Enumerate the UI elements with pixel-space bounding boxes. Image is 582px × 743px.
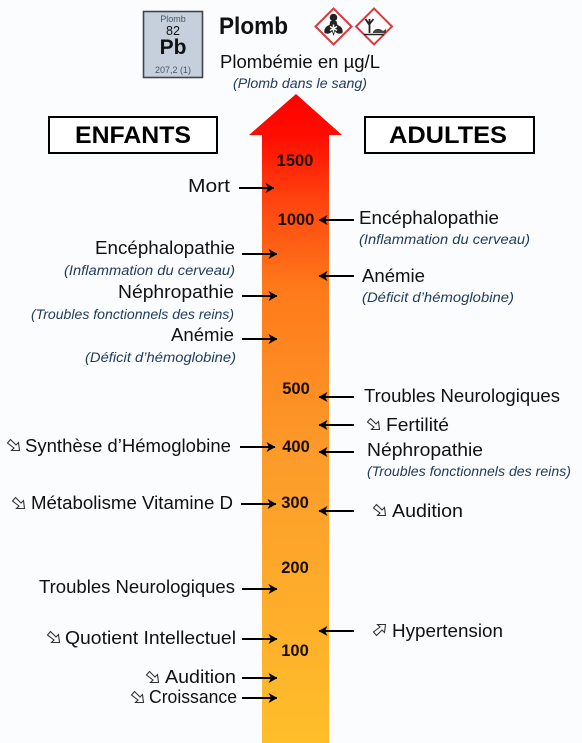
heading: Plomb: Plomb (219, 13, 288, 40)
arrow: Hypertension (319, 630, 354, 632)
note: Plomb dans le sang: (Plomb dans le sang) (233, 76, 367, 91)
scale values: 1500 (277, 152, 313, 170)
arrow: Encéphalopathie (242, 253, 277, 255)
arrow: Troubles Neurologiques (242, 588, 277, 590)
effect: Anémie: Anémie (171, 325, 234, 345)
effect: Quotient Intellectuel: Quotient Intellectuel (65, 628, 236, 648)
icon: decrease (12, 498, 24, 508)
effect: Audition: Audition (165, 667, 236, 687)
icon: decrease (146, 672, 158, 682)
heading box: ADULTES: ADULTES (389, 122, 507, 149)
element tile: lead: 207,2 (1) (155, 65, 191, 75)
arrow: Anémie (319, 275, 354, 277)
arrow: Croissance (242, 697, 277, 699)
heading box: ENFANTS (49, 117, 217, 153)
icon: decrease (48, 632, 60, 642)
arrow: Encéphalopathie (319, 219, 354, 221)
adult effects (319, 208, 571, 641)
arrow: Synthèse d'Hémoglobine (240, 446, 275, 448)
effect: Audition: Audition (392, 501, 463, 521)
effect: Synthèse d'Hémoglobine: Synthèse d’Hémoglobine (25, 436, 231, 456)
effect: Encéphalopathie: Encéphalopathie (95, 238, 235, 258)
icon: increase (374, 624, 386, 636)
scale values (277, 152, 314, 660)
element tile: lead: Plomb (160, 14, 186, 24)
icon: decrease (374, 504, 386, 516)
element tile: lead: 82 (166, 24, 180, 38)
scale values: 1000 (278, 211, 314, 229)
arrow: Quotient Intellectuel (242, 638, 277, 640)
element tile: lead (144, 12, 202, 78)
icon: environment hazard pictogram (356, 8, 392, 44)
scale values: 300 (281, 494, 309, 512)
subtitle: Plombémie: Plombémie en µg/L (220, 52, 380, 72)
heading box: ENFANTS: ENFANTS (75, 122, 191, 149)
note: Troubles fonctionnels des reins: (Troubles fonctionnels des reins) (367, 464, 571, 479)
effect: Néphropathie: Néphropathie (118, 282, 234, 302)
scale values: 500 (282, 380, 310, 398)
note: Troubles fonctionnels des reins: (Troubles fonctionnels des reins) (31, 307, 234, 322)
element tile: lead: Pb (160, 36, 186, 59)
arrow: Anémie (242, 338, 277, 340)
effect: Encéphalopathie: Encéphalopathie (359, 208, 499, 228)
concentration scale arrow (249, 94, 342, 743)
arrow: Néphropathie (242, 295, 277, 297)
arrow: Métabolisme Vitamine D (241, 503, 276, 505)
effect: Fertilité: Fertilité (386, 415, 449, 435)
scale values: 100 (281, 642, 309, 660)
arrow: Mort (239, 187, 274, 189)
icon: health hazard pictogram (316, 8, 352, 44)
note: Inflammation du cerveau: (Inflammation du cerveau) (64, 263, 235, 278)
icon: decrease (8, 440, 20, 450)
note: Déficit d'hémoglobine: (Déficit d’hémoglobine) (85, 350, 236, 365)
effect: Hypertension: Hypertension (392, 621, 503, 641)
arrow: Audition (319, 510, 354, 512)
icon: decrease (132, 692, 144, 702)
arrow: Fertilité (319, 424, 354, 426)
arrow: Néphropathie (319, 451, 354, 453)
scale values: 400 (282, 438, 310, 456)
scale values: 200 (281, 559, 309, 577)
arrow: Troubles Neurologiques (319, 396, 354, 398)
effect: Troubles Neurologiques: Troubles Neurologiques (39, 577, 235, 597)
arrow: Audition (242, 677, 277, 679)
heading box: ADULTES (365, 117, 534, 153)
note: Inflammation du cerveau: (Inflammation du cerveau) (359, 232, 530, 247)
icon: decrease (368, 418, 380, 430)
children effects (8, 176, 277, 707)
effect: Croissance: Croissance (149, 687, 237, 707)
effect: Troubles Neurologiques: Troubles Neurologiques (364, 386, 560, 406)
effect: Mort: Mort (188, 176, 230, 196)
effect: Néphropathie: Néphropathie (367, 440, 483, 460)
effect: Anémie: Anémie (362, 266, 425, 286)
effect: Métabolisme Vitamine D: Métabolisme Vitamine D (31, 493, 233, 513)
note: Déficit d'hémoglobine: (Déficit d’hémoglobine) (362, 290, 514, 305)
